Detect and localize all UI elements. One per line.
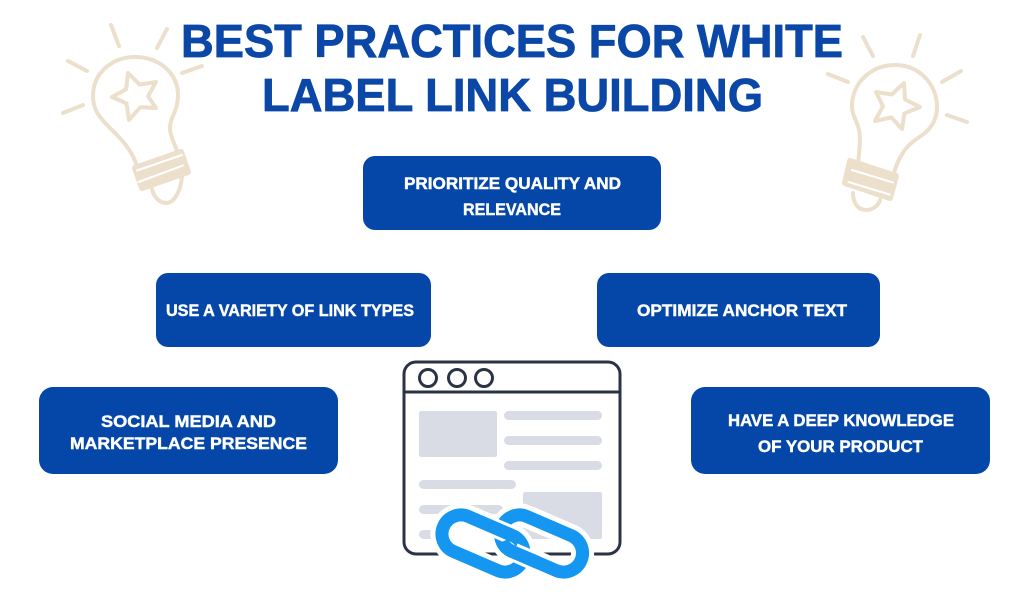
- panel: social media and marketplace presence: SOCIAL MEDIA AND: [101, 412, 276, 431]
- panel: use a variety of link types: USE A VARIETY OF LINK TYPES: [166, 301, 414, 320]
- title: [181, 15, 843, 121]
- icon: browser window with chain link: [404, 362, 620, 578]
- title: LABEL LINK BUILDING: [262, 69, 763, 121]
- icon: chain link: [436, 509, 589, 578]
- panel: have a deep knowledge of your product: [691, 387, 990, 474]
- panel: prioritize quality and relevance: RELEVANCE: [463, 200, 561, 219]
- panel: have a deep knowledge of your product: HAVE A DEEP KNOWLEDGE: [728, 411, 954, 430]
- panel: optimize anchor text: [597, 273, 880, 347]
- panel: social media and marketplace presence: [39, 387, 338, 474]
- panel: social media and marketplace presence: MARKETPLACE PRESENCE: [70, 434, 307, 453]
- panel: prioritize quality and relevance: [363, 156, 661, 230]
- icon: right light bulb: [828, 35, 967, 210]
- browser window: [404, 362, 620, 554]
- panel: use a variety of link types: [156, 273, 431, 347]
- title: BEST PRACTICES FOR WHITE: [181, 15, 843, 67]
- panel: have a deep knowledge of your product: OF YOUR PRODUCT: [758, 437, 924, 456]
- icon: left light bulb: [63, 25, 202, 203]
- panel: optimize anchor text: OPTIMIZE ANCHOR TEXT: [637, 301, 848, 320]
- panel: prioritize quality and relevance: PRIORITIZE QUALITY AND: [404, 174, 621, 193]
